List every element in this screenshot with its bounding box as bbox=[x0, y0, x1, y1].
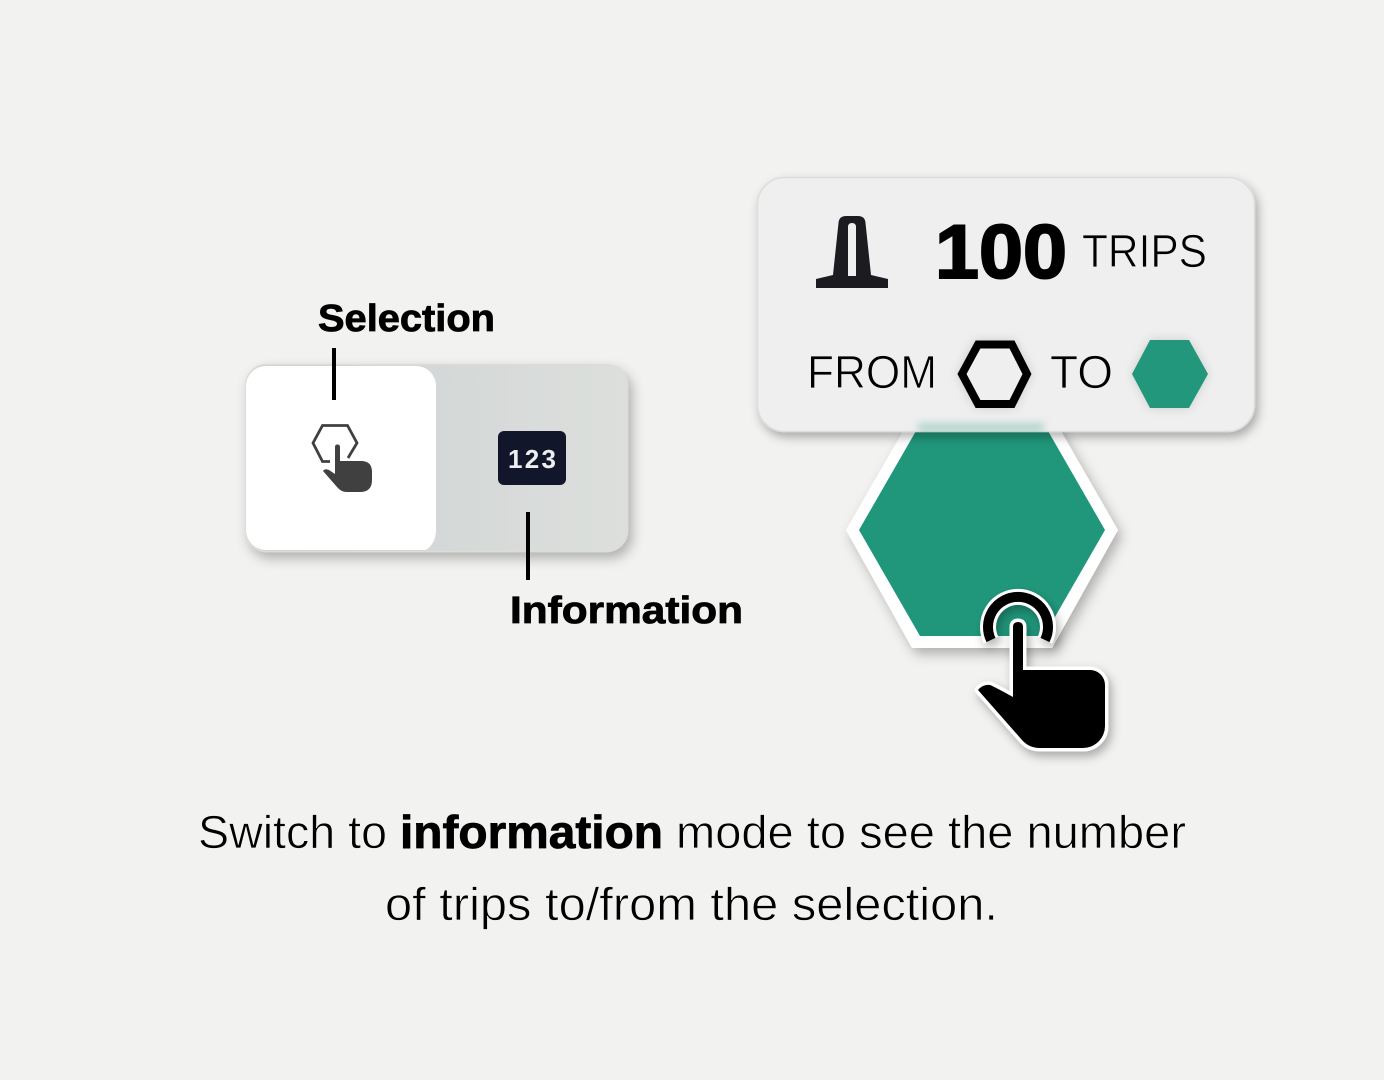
label: Selection bbox=[318, 298, 495, 400]
icon: cone bbox=[816, 216, 888, 288]
text: TO: TO bbox=[1050, 346, 1113, 398]
panel: trips information card bbox=[758, 178, 1254, 432]
panel: mode toggle bbox=[246, 364, 628, 552]
icon: filled hexagon bbox=[1132, 340, 1208, 408]
caption: Switch to bbox=[198, 806, 387, 858]
toggle track bbox=[246, 364, 628, 552]
text: FROM: FROM bbox=[807, 346, 937, 398]
label: Information: Information bbox=[510, 590, 743, 632]
label: Information bbox=[510, 512, 743, 632]
caption: mode to see the number bbox=[676, 806, 1186, 858]
icon: outlined hexagon bbox=[962, 344, 1027, 404]
icon: selection hand bbox=[313, 426, 372, 492]
tap ring bbox=[988, 597, 1048, 640]
icon: tapping hand bbox=[978, 597, 1105, 748]
caption: information bbox=[400, 806, 663, 858]
hand pointer bbox=[978, 622, 1105, 748]
icon: information 123 badge bbox=[498, 431, 566, 485]
icon: information 123 badge: 123 bbox=[508, 444, 556, 474]
stat: 100 trips bbox=[935, 210, 1207, 295]
caption bbox=[198, 806, 1186, 930]
teal glow bbox=[918, 423, 1044, 432]
large selected hexagon bbox=[846, 412, 1118, 648]
stat: 100 trips: 100 bbox=[935, 210, 1067, 295]
caption: of trips to/from the selection. bbox=[385, 878, 998, 930]
stat: 100 trips: TRIPS bbox=[1082, 225, 1207, 277]
selection button bbox=[246, 366, 436, 550]
label: Selection: Selection bbox=[318, 298, 495, 340]
